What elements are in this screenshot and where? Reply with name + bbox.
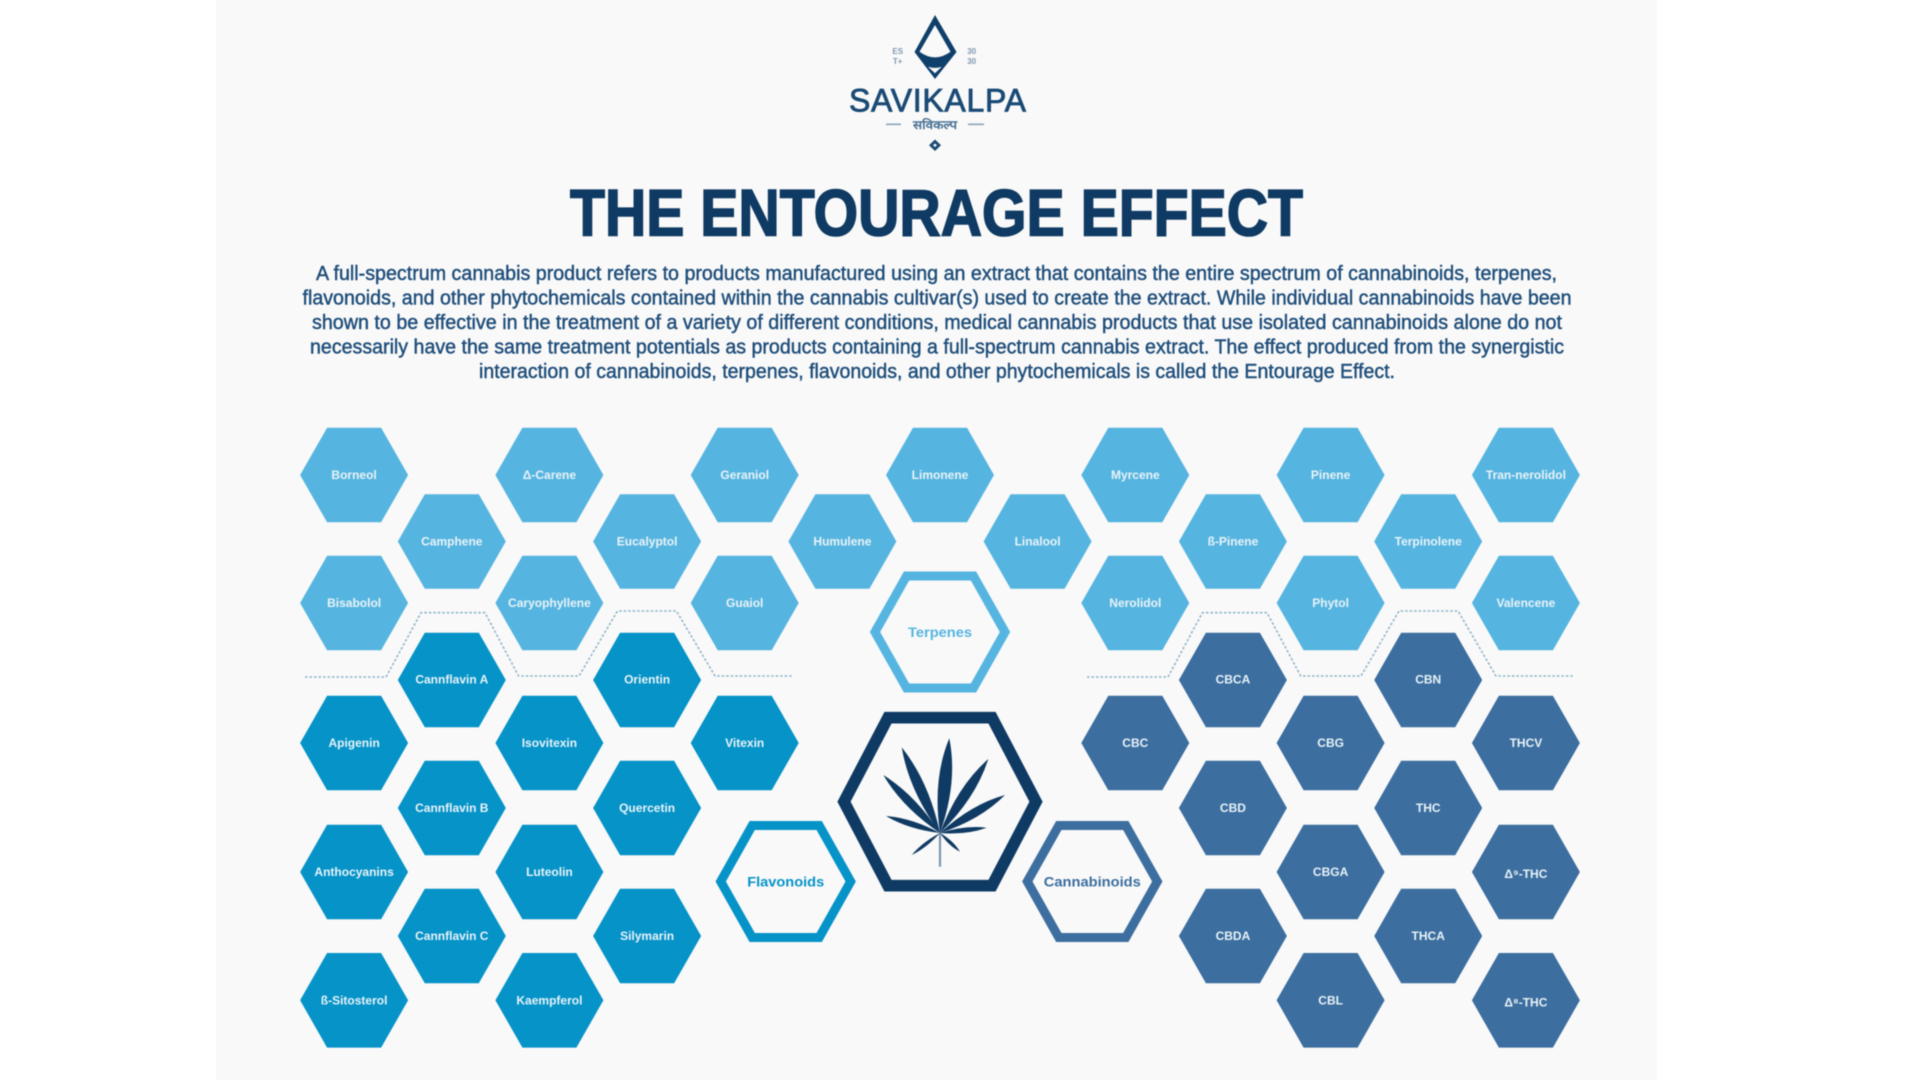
category hex: Cannabinoids xyxy=(1027,826,1157,938)
hex: Cannflavin A xyxy=(398,633,506,727)
central hexagon with cannabis leaf xyxy=(844,718,1036,886)
logo small text right: 30 xyxy=(967,47,977,56)
divider: dotted left boundary xyxy=(305,611,792,677)
hex: CBN: CBN xyxy=(1415,672,1441,686)
text block: introduction: flavonoids, and other phytochemicals contained within the cannabis cultivar(s) used to create the extract. While individual cannabinoids have been xyxy=(302,288,1572,310)
hex: THCV: THCV xyxy=(1510,736,1542,750)
hex: Eucalyptol xyxy=(593,494,701,589)
title: THE ENTOURAGE EFFECT xyxy=(570,176,1303,250)
hex: Guaiol: Guaiol xyxy=(726,596,763,610)
hex: Delta-8-THC: Δ⁸-THC xyxy=(1504,995,1548,1009)
hex: THCV xyxy=(1472,696,1580,790)
hex: Myrcene: Myrcene xyxy=(1111,468,1160,482)
hex: Delta-Carene: Δ-Carene xyxy=(523,468,576,482)
category hex: Flavonoids xyxy=(721,826,851,938)
hex: Borneol: Borneol xyxy=(331,468,377,482)
hex: Cannflavin C: Cannflavin C xyxy=(415,929,489,943)
hex: Guaiol xyxy=(691,556,799,650)
hex: Terpinolene xyxy=(1374,494,1482,589)
hex: Eucalyptol: Eucalyptol xyxy=(617,534,677,548)
hex: Bisabolol: Bisabolol xyxy=(327,596,381,610)
hex: Orientin xyxy=(593,633,701,727)
hex: THC: THC xyxy=(1416,801,1441,815)
hex: CBDA xyxy=(1179,889,1287,983)
panel: cannabinoid hexagons xyxy=(1081,633,1580,1048)
hex: Cannflavin B: Cannflavin B xyxy=(415,801,489,815)
hex: Limonene: Limonene xyxy=(912,468,969,482)
logo small text left: ES xyxy=(892,47,904,56)
hex: CBGA: CBGA xyxy=(1313,865,1349,879)
hex: Kaempferol: Kaempferol xyxy=(516,993,582,1007)
text block: introduction: interaction of cannabinoids, terpenes, flavonoids, and other phytochemicals is called the Entourage Effect. xyxy=(479,361,1395,383)
hex: CBGA xyxy=(1277,825,1385,919)
hex: Caryophyllene: Caryophyllene xyxy=(508,596,591,610)
hex: Quercetin: Quercetin xyxy=(619,801,675,815)
hex: Valencene xyxy=(1472,556,1580,650)
hex: Beta-Sitosterol: ß-Sitosterol xyxy=(321,993,387,1007)
hex: Delta-Carene xyxy=(495,428,603,522)
hex: Quercetin xyxy=(593,761,701,855)
hex: Silymarin xyxy=(593,889,701,983)
hex: Tran-nerolidol: Tran-nerolidol xyxy=(1486,468,1566,482)
panel: page background xyxy=(216,0,1657,1080)
text block: introduction: A full-spectrum cannabis product refers to products manufactured using an extract that contains the entire spectrum of cannabinoids, terpenes, xyxy=(316,263,1557,285)
hex: CBG: CBG xyxy=(1317,736,1344,750)
hex: Geraniol xyxy=(691,428,799,522)
hex: Luteolin xyxy=(495,825,603,919)
hex: THCA xyxy=(1374,889,1482,983)
icon: logo small diamond xyxy=(929,140,941,151)
hex: Delta-9-THC xyxy=(1472,825,1580,919)
hex: Nerolidol xyxy=(1081,556,1189,650)
hex: Humulene xyxy=(788,494,896,589)
hex: Isovitexin xyxy=(495,696,603,790)
hex: Phytol xyxy=(1277,556,1385,650)
hex: CBCA: CBCA xyxy=(1216,672,1251,686)
hex: CBN xyxy=(1374,633,1482,727)
hex: Anthocyanins xyxy=(300,825,408,919)
hex: CBCA xyxy=(1179,633,1287,727)
hex: CBDA: CBDA xyxy=(1216,929,1251,943)
hex: Humulene: Humulene xyxy=(813,534,872,548)
hex: Delta-8-THC xyxy=(1472,953,1580,1048)
hex: Vitexin: Vitexin xyxy=(725,736,764,750)
logo dash left xyxy=(886,124,901,125)
hex: Cannflavin B xyxy=(398,761,506,855)
hex: Luteolin: Luteolin xyxy=(526,865,573,879)
icon: cannabis leaf xyxy=(883,738,1005,867)
hex: Linalool xyxy=(984,494,1092,589)
hex: Pinene: Pinene xyxy=(1311,468,1351,482)
hex: CBL xyxy=(1277,953,1385,1048)
hex: Caryophyllene xyxy=(495,556,603,650)
category hex: Cannabinoids: Cannabinoids xyxy=(1044,874,1141,890)
hex: Myrcene xyxy=(1081,428,1189,522)
hex: CBG xyxy=(1277,696,1385,790)
hex: Silymarin: Silymarin xyxy=(620,929,674,943)
text block: introduction: necessarily have the same treatment potentials as products containing a full-spectrum cannabis extract. The effect produced from the synergistic xyxy=(310,336,1564,358)
hex: Cannflavin C xyxy=(398,889,506,983)
category hex: Terpenes xyxy=(875,576,1005,688)
hex: Beta-Pinene: ß-Pinene xyxy=(1208,534,1259,548)
hex: CBC: CBC xyxy=(1122,736,1149,750)
hex: Apigenin: Apigenin xyxy=(328,736,380,750)
hex: CBL: CBL xyxy=(1318,993,1343,1007)
hex: Geraniol: Geraniol xyxy=(720,468,769,482)
icon: logo diamond drop xyxy=(914,15,956,79)
hex: THC xyxy=(1374,761,1482,855)
hex: Cannflavin A: Cannflavin A xyxy=(415,672,489,686)
hex: Delta-9-THC: Δ⁹-THC xyxy=(1504,867,1548,881)
logo small text right second line: 30 xyxy=(967,57,977,66)
logo: Savikalpa xyxy=(849,15,1027,151)
category hex: Flavonoids: Flavonoids xyxy=(747,874,824,890)
hex: Camphene: Camphene xyxy=(421,534,483,548)
hex: Beta-Pinene xyxy=(1179,494,1287,589)
hex: Nerolidol: Nerolidol xyxy=(1109,596,1161,610)
hex: CBC xyxy=(1081,696,1189,790)
hex: Orientin: Orientin xyxy=(624,672,670,686)
category hex: Terpenes: Terpenes xyxy=(908,624,972,640)
hex: Vitexin xyxy=(691,696,799,790)
text block: introduction: shown to be effective in the treatment of a variety of different conditions, medical cannabis products that use isolated cannabinoids alone do not xyxy=(312,312,1562,334)
logo dash right xyxy=(968,124,984,125)
panel: flavonoid hexagons xyxy=(300,633,799,1048)
hex: Bisabolol xyxy=(300,556,408,650)
hex: Valencene: Valencene xyxy=(1497,596,1556,610)
hex: Limonene xyxy=(886,428,994,522)
hex: THCA: THCA xyxy=(1412,929,1445,943)
hex: CBD xyxy=(1179,761,1287,855)
central hexagon outline xyxy=(844,718,1036,886)
hex: Beta-Sitosterol xyxy=(300,953,408,1048)
hex: Apigenin xyxy=(300,696,408,790)
hex: Tran-nerolidol xyxy=(1472,428,1580,522)
hex: Kaempferol xyxy=(495,953,603,1048)
logo wordmark: SAVIKALPA xyxy=(849,82,1027,118)
hex: Borneol xyxy=(300,428,408,522)
hex: Pinene xyxy=(1277,428,1385,522)
hex: Camphene xyxy=(398,494,506,589)
hex: Isovitexin: Isovitexin xyxy=(522,736,577,750)
logo sub wordmark: सविकल्प xyxy=(912,118,958,132)
text block: introduction xyxy=(302,263,1572,383)
hex: Anthocyanins: Anthocyanins xyxy=(314,865,394,879)
hex: Terpinolene: Terpinolene xyxy=(1395,534,1462,548)
hex: Linalool: Linalool xyxy=(1015,534,1061,548)
hex: Phytol: Phytol xyxy=(1312,596,1349,610)
panel: terpene hexagons xyxy=(300,428,1580,650)
hex: CBD: CBD xyxy=(1220,801,1246,815)
divider: dotted right boundary xyxy=(1087,611,1573,677)
logo small text left second line: T+ xyxy=(893,57,903,66)
